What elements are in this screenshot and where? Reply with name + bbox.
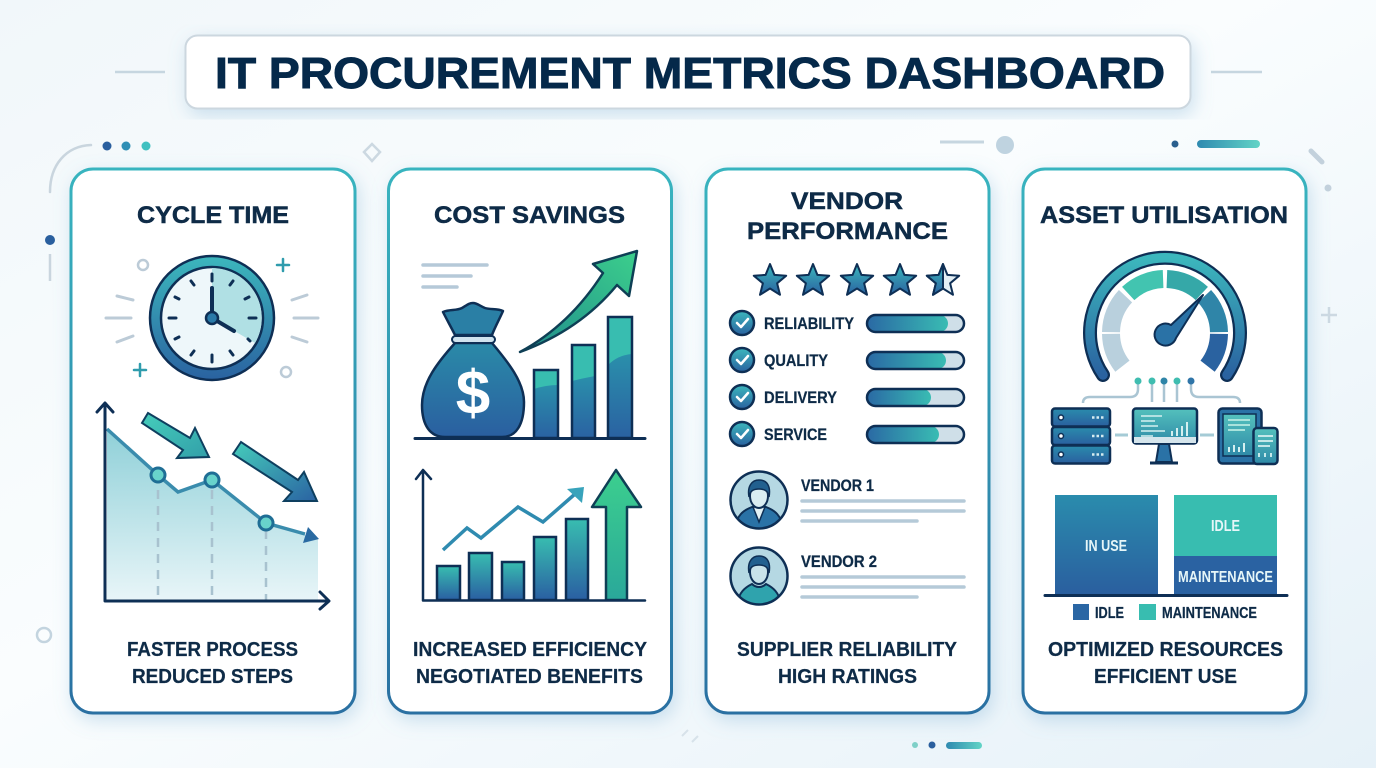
panel: asset utilisation bbox=[1023, 169, 1306, 713]
rating rows: RELIABILITY bbox=[764, 314, 855, 333]
rating rows: SERVICE bbox=[764, 425, 827, 444]
title bbox=[186, 36, 1190, 108]
icon: monitor bbox=[1133, 408, 1197, 463]
caption: cycle time: REDUCED STEPS bbox=[132, 666, 293, 688]
legend: IDLE bbox=[1095, 605, 1124, 622]
heading: vendor performance: VENDOR bbox=[791, 188, 903, 215]
heading: vendor performance bbox=[747, 188, 948, 245]
caption: cycle time bbox=[127, 639, 298, 688]
line chart: falling cycle time bbox=[97, 403, 329, 609]
caption: cost savings bbox=[413, 639, 648, 688]
stacked blocks chart: IDLE bbox=[1211, 518, 1240, 535]
vendor 1 bbox=[730, 472, 964, 530]
caption: vendor performance: HIGH RATINGS bbox=[778, 666, 917, 688]
note lines bbox=[423, 265, 487, 287]
icon: gauge bbox=[1090, 258, 1240, 375]
heading: asset utilisation: ASSET UTILISATION bbox=[1040, 202, 1288, 229]
caption: cycle time: FASTER PROCESS bbox=[127, 639, 298, 661]
panel: cost savings bbox=[388, 169, 672, 713]
icon: tablet and phone bbox=[1218, 408, 1278, 464]
heading: cost savings: COST SAVINGS bbox=[434, 202, 625, 229]
connectors bbox=[1083, 378, 1240, 435]
vendor 1: VENDOR 1 bbox=[801, 477, 874, 495]
vendor 2 bbox=[730, 548, 964, 606]
caption: asset utilisation: OPTIMIZED RESOURCES bbox=[1048, 639, 1283, 661]
legend bbox=[1073, 604, 1257, 622]
title: IT PROCUREMENT METRICS DASHBOARD bbox=[215, 49, 1165, 98]
rating rows: DELIVERY bbox=[764, 388, 838, 407]
stacked blocks chart: IN USE bbox=[1085, 538, 1127, 555]
icon: money bag bbox=[422, 303, 524, 437]
panel: vendor performance bbox=[706, 169, 989, 713]
icon: server bbox=[1052, 408, 1110, 464]
arrow: down trend one bbox=[142, 413, 209, 458]
baseline: savings bbox=[415, 437, 645, 440]
caption: cost savings: NEGOTIATED BENEFITS bbox=[416, 666, 643, 688]
caption: asset utilisation: EFFICIENT USE bbox=[1094, 666, 1237, 688]
stacked blocks chart: MAINTENANCE bbox=[1178, 569, 1273, 586]
rating rows bbox=[730, 311, 964, 446]
panel: cycle time bbox=[71, 169, 355, 713]
arrow: savings growth bbox=[520, 251, 637, 352]
rating rows: QUALITY bbox=[764, 351, 829, 370]
bar chart: efficiency bbox=[416, 470, 645, 600]
icon: money bag: $ bbox=[456, 359, 490, 428]
caption: asset utilisation bbox=[1048, 639, 1283, 688]
caption: vendor performance: SUPPLIER RELIABILITY bbox=[737, 639, 958, 661]
caption: vendor performance bbox=[737, 639, 958, 688]
star rating bbox=[754, 264, 959, 295]
heading: cycle time: CYCLE TIME bbox=[137, 202, 289, 229]
clock sparkles bbox=[106, 259, 318, 377]
stacked blocks chart bbox=[1045, 495, 1287, 596]
caption: cost savings: INCREASED EFFICIENCY bbox=[413, 639, 648, 661]
legend: MAINTENANCE bbox=[1162, 605, 1257, 622]
vendor 2: VENDOR 2 bbox=[801, 553, 877, 571]
heading: vendor performance: PERFORMANCE bbox=[747, 218, 948, 245]
icon: clock bbox=[150, 256, 274, 380]
bar chart: savings bbox=[534, 317, 632, 438]
arrow: down trend two bbox=[233, 442, 317, 501]
